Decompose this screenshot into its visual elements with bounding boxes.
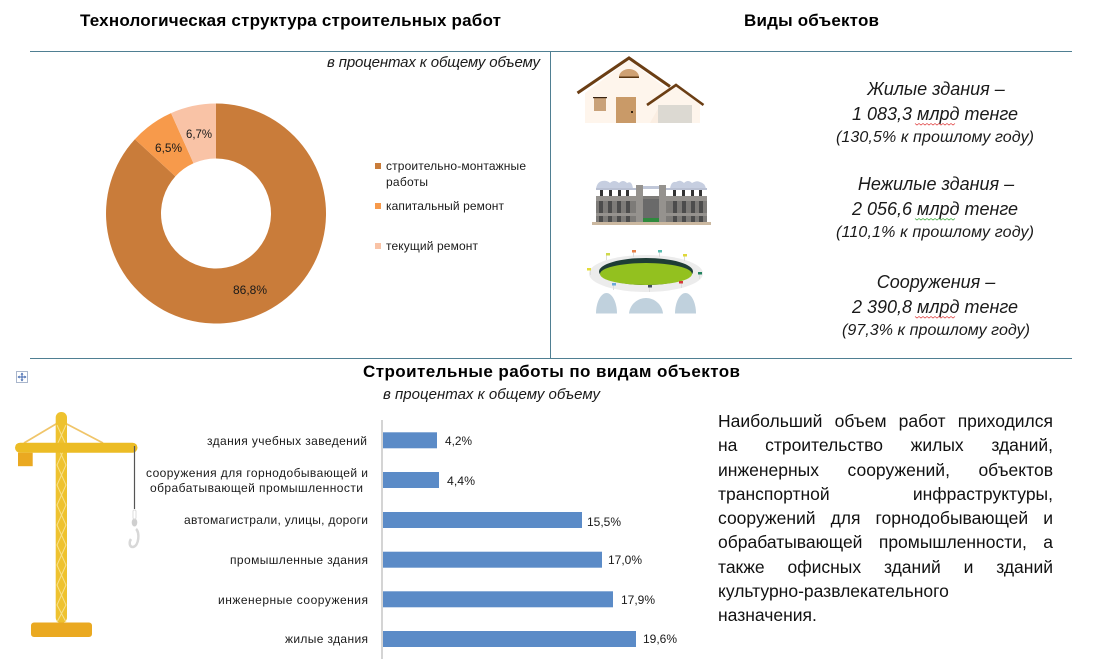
bar chart: здания учебных заведений — [207, 434, 367, 448]
bar chart: 15,5% — [587, 515, 621, 529]
bar chart: инженерные сооружения — [218, 593, 368, 607]
bar chart — [146, 420, 677, 659]
donut chart — [106, 104, 326, 324]
text block: conclusion paragraph: культурно-развлекательного — [718, 581, 949, 601]
bar chart: 17,0% — [608, 553, 642, 567]
text block: conclusion paragraph: также офисных зданий и зданий — [718, 556, 1053, 576]
stat: residential buildings — [836, 79, 1034, 146]
bar chart: 19,6% — [643, 632, 677, 646]
bar chart: обрабатывающей промышленности — [150, 481, 363, 495]
stat: residential buildings: Жилые здания – — [866, 79, 1006, 99]
heading: technological structure: Технологическая структура строительных работ — [80, 11, 501, 30]
donut chart: 86,8% — [233, 283, 267, 297]
stat: residential buildings: (130,5% к прошлому году) — [836, 129, 1034, 146]
bar chart: 4,4% — [447, 474, 475, 488]
bar chart: 17,9% — [621, 593, 655, 607]
icon: non-residential building — [592, 181, 711, 225]
text block: conclusion paragraph: обрабатывающей промышленности, а — [718, 532, 1053, 552]
donut chart: 6,5% — [155, 141, 182, 155]
stat: structures: (97,3% к прошлому году) — [842, 322, 1030, 339]
text block: conclusion paragraph: инженерных сооружений, объектов — [718, 460, 1053, 480]
text block: conclusion paragraph: назначения. — [718, 605, 817, 625]
stat: structures: Сооружения – — [877, 272, 996, 292]
bar chart: сооружения для горнодобывающей и — [146, 466, 368, 480]
donut chart: 6,7% — [186, 127, 212, 141]
bar chart: жилые здания — [285, 632, 368, 646]
donut legend — [375, 159, 526, 253]
stat: non-residential buildings: (110,1% к прошлому году) — [836, 224, 1034, 241]
note: percent of total, bar chart: в процентах к общему объему — [383, 386, 602, 403]
donut legend: текущий ремонт — [386, 239, 478, 253]
text block: conclusion paragraph: транспортной инфраструктуры, — [718, 484, 1053, 504]
donut legend: строительно-монтажные — [386, 159, 526, 173]
icon: house — [578, 58, 704, 123]
text block: conclusion paragraph: сооружений для горнодобывающей и — [718, 508, 1053, 528]
text block: conclusion paragraph: Наибольший объем работ приходился — [718, 411, 1053, 431]
bar chart: промышленные здания — [230, 553, 368, 567]
stat: structures: 2 390,8 млрд тенге — [851, 297, 1018, 317]
text block: conclusion paragraph: на строительство жилых зданий, — [718, 435, 1053, 455]
icon: tower crane — [15, 412, 138, 637]
donut legend: работы — [386, 175, 428, 189]
stat: residential buildings: 1 083,3 млрд тенге — [852, 104, 1018, 124]
note: percent of total, donut: в процентах к общему объему — [327, 54, 542, 71]
stat: non-residential buildings — [836, 174, 1034, 241]
heading: works by object type: Строительные работы по видам объектов — [363, 362, 740, 381]
donut legend: капитальный ремонт — [386, 199, 504, 213]
stat: non-residential buildings: Нежилые здания – — [858, 174, 1015, 194]
stat: non-residential buildings: 2 056,6 млрд тенге — [851, 199, 1018, 219]
icon: table move handle — [16, 372, 28, 382]
stat: structures — [842, 272, 1030, 339]
icon: stadium — [587, 250, 703, 314]
heading: object types: Виды объектов — [744, 11, 879, 30]
bar chart: автомагистрали, улицы, дороги — [184, 513, 368, 527]
text block: conclusion paragraph — [718, 411, 1053, 625]
bar chart: 4,2% — [445, 434, 472, 448]
